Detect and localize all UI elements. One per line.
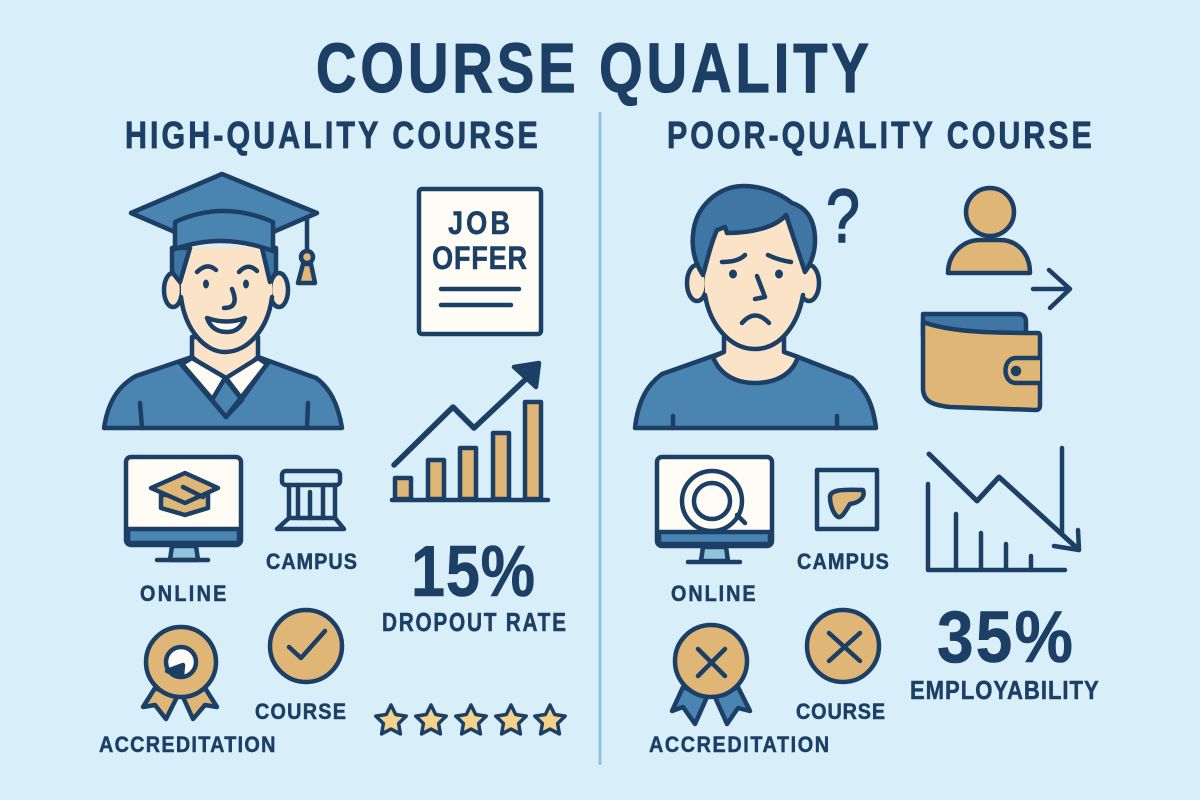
icon: smiling graduate: [104, 174, 342, 428]
icon: right arrow: [1033, 270, 1070, 308]
label: course: COURSE: [255, 700, 346, 724]
panel: high-quality course: [99, 115, 566, 757]
icon: failed accreditation medal: [672, 625, 750, 724]
icon: online monitor: [126, 457, 241, 560]
label: course: COURSE: [796, 700, 885, 724]
icon: job offer document: OFFER: [432, 241, 527, 277]
panel: poor-quality course: [635, 115, 1099, 757]
icon: accreditation medal: [143, 627, 217, 719]
label: accreditation: ACCREDITATION: [649, 733, 829, 757]
label: campus: CAMPUS: [797, 550, 889, 574]
icon: campus placeholder box: [817, 470, 877, 529]
stat: 15 percent: 15%: [411, 532, 535, 612]
chart: rising bars with arrow: [392, 363, 548, 500]
icon: course cross: [807, 610, 879, 682]
chart: falling line: [928, 448, 1079, 570]
label: employability: EMPLOYABILITY: [910, 676, 1099, 705]
title: COURSE QUALITY: [316, 30, 869, 107]
icon: job offer document: JOB: [448, 206, 510, 242]
icon: campus building: [277, 471, 344, 529]
icon: job offer document: [419, 189, 541, 334]
icon: person leaving: [948, 188, 1030, 273]
label: dropout rate: DROPOUT RATE: [382, 608, 566, 637]
icon: question mark: ?: [826, 174, 860, 259]
label: online: ONLINE: [140, 582, 226, 606]
heading: high-quality course: HIGH-QUALITY COURSE: [125, 115, 538, 157]
icon: online monitor with magnifier: [657, 457, 772, 562]
label: online: ONLINE: [671, 582, 756, 606]
icon: confused student: [635, 186, 876, 428]
label: campus: CAMPUS: [266, 550, 357, 574]
stat: 35 percent: 35%: [937, 596, 1073, 678]
icon: wallet: [923, 314, 1040, 410]
heading: poor-quality course: POOR-QUALITY COURSE: [667, 115, 1092, 157]
label: accreditation: ACCREDITATION: [99, 733, 275, 757]
icon: course check: [270, 610, 342, 682]
icon: five star rating: [376, 705, 565, 734]
